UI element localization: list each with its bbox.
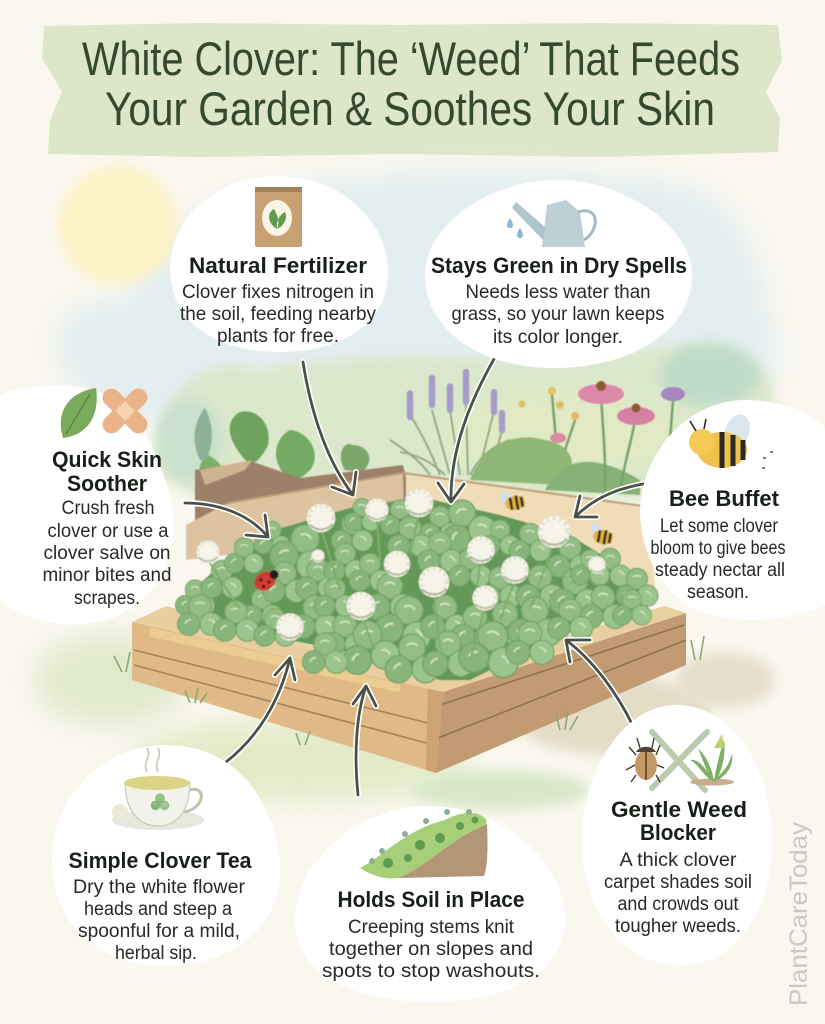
panel: holds soil in place: Holds Soil in Place	[338, 887, 524, 912]
bees in garden	[497, 487, 615, 546]
panel: simple clover tea: Simple Clover Tea	[68, 848, 252, 873]
panel: quick skin soother	[0, 371, 174, 624]
panel: quick skin soother: clover salve on	[44, 543, 170, 564]
back raised beds	[186, 460, 655, 590]
arrow: clover tea	[218, 658, 295, 768]
icon: bee	[689, 411, 773, 468]
clover mound	[176, 487, 658, 683]
panel: quick skin soother: scrapes.	[74, 588, 140, 609]
panel: gentle weed blocker: carpet shades soil	[604, 872, 752, 893]
panel: bee buffet	[640, 400, 825, 620]
panel: stays green: Stays Green in Dry Spells	[431, 253, 687, 278]
clover flowers	[196, 489, 606, 641]
ladybug	[251, 565, 283, 594]
panel: gentle weed blocker: and crowds out	[618, 894, 739, 915]
front raised bed	[132, 606, 686, 773]
panel: holds soil in place: spots to stop washouts.	[322, 961, 540, 982]
panel: simple clover tea: herbal sip.	[115, 943, 197, 964]
panel: natural fertilizer: the soil, feeding nearby	[180, 304, 376, 325]
arrow: quick skin soother	[185, 503, 268, 537]
panel: holds soil in place	[295, 806, 565, 1002]
panel: simple clover tea: heads and steep a	[84, 899, 232, 920]
icon: tea cup	[112, 748, 204, 830]
grass tufts	[114, 636, 704, 745]
panel: quick skin soother: Crush fresh	[62, 498, 154, 519]
panel: bee buffet: Bee Buffet	[669, 486, 780, 511]
arrow: holds soil	[353, 686, 376, 795]
panel: simple clover tea: spoonful for a mild,	[78, 921, 240, 942]
panel: natural fertilizer: Clover fixes nitrogen in	[182, 282, 374, 303]
icon: soil slope	[360, 809, 488, 878]
panel: natural fertilizer	[170, 176, 388, 352]
panel: holds soil in place: Creeping stems knit	[348, 917, 515, 938]
icon: fertilizer bag	[255, 187, 302, 247]
arrow: stays green	[438, 352, 498, 502]
icon: watering can	[507, 200, 595, 247]
flower border	[470, 381, 685, 495]
arrow: bee buffet	[575, 483, 650, 517]
arrow: weed blocker	[566, 640, 633, 726]
lavender	[390, 372, 510, 475]
panel: simple clover tea: Dry the white flower	[73, 877, 246, 898]
panel: bee buffet: bloom to give bees	[650, 538, 786, 559]
rim	[132, 606, 686, 692]
panel: gentle weed blocker: Blocker	[640, 820, 716, 845]
panel: bee buffet: season.	[687, 582, 749, 603]
panel: natural fertilizer: plants for free.	[217, 326, 339, 347]
panel: quick skin soother: Quick Skin	[52, 447, 162, 472]
panel: stays green: Needs less water than	[466, 282, 650, 303]
panel: simple clover tea	[52, 745, 280, 966]
right face	[436, 613, 686, 773]
panel: gentle weed blocker: A thick clover	[620, 850, 737, 871]
panel: holds soil in place: together on slopes and	[329, 939, 533, 960]
clover stems	[208, 513, 554, 660]
arrows	[185, 352, 650, 795]
corner post	[426, 686, 443, 773]
panel: natural fertilizer: Natural Fertilizer	[189, 253, 367, 278]
seedlings	[195, 408, 369, 496]
panel: stays green	[425, 180, 692, 368]
left face	[132, 622, 443, 773]
title text: Your Garden & Soothes Your Skin	[105, 82, 715, 135]
panel: gentle weed blocker: tougher weeds.	[615, 916, 741, 937]
panel: bee buffet: Let some clover	[660, 516, 779, 537]
watermark: PlantCareToday	[785, 821, 813, 1006]
panel: quick skin soother: Soother	[67, 471, 147, 496]
panel: stays green: its color longer.	[493, 327, 623, 348]
panel: quick skin soother: clover or use a	[48, 521, 169, 542]
arrow: natural fertilizer	[303, 362, 356, 495]
icon: leaf and bandage	[61, 371, 165, 451]
panel: gentle weed blocker: Gentle Weed	[611, 797, 747, 822]
title banner	[42, 23, 782, 157]
panel: gentle weed blocker	[582, 705, 772, 965]
background plants	[195, 372, 685, 496]
panel: bee buffet: steady nectar all	[655, 560, 785, 581]
panel: stays green: grass, so your lawn keeps	[452, 304, 664, 325]
watercolor sky and garden wash	[35, 165, 777, 810]
title text	[82, 32, 740, 135]
panel: quick skin soother: minor bites and	[42, 565, 172, 586]
icon: beetle and crossed weed	[626, 732, 734, 790]
